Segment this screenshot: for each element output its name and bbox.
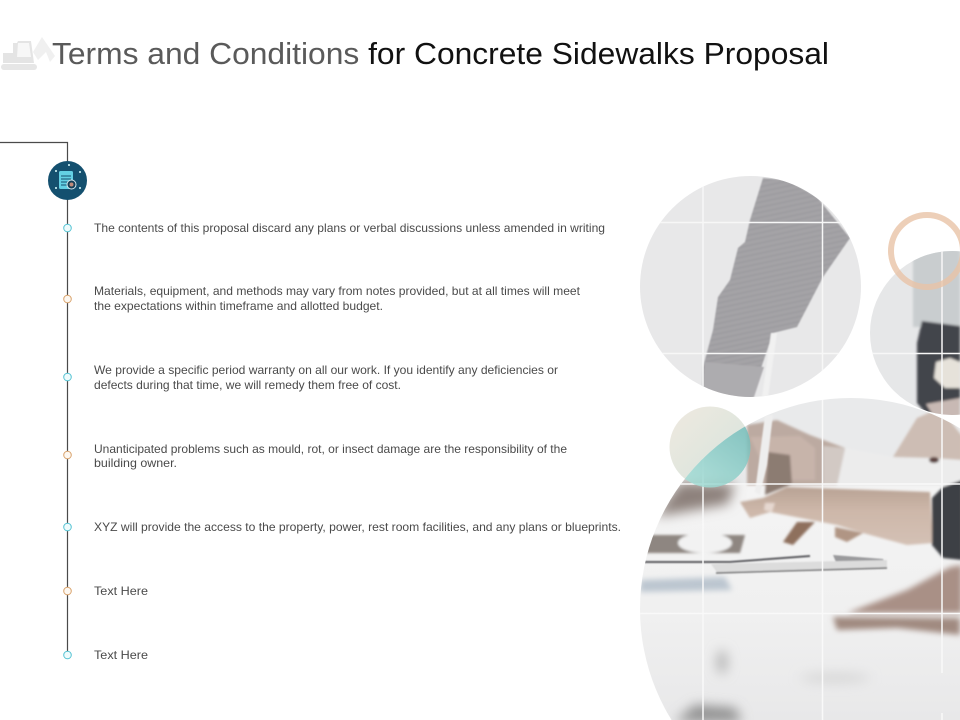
decorative peach ring <box>891 215 960 287</box>
item 7 <box>64 648 148 662</box>
icon: faint excavator <box>1 37 55 70</box>
photo circle: sleeve <box>640 176 861 397</box>
item 6: Text Here <box>94 584 148 598</box>
item 4: Unanticipated problems such as mould, rot, or insect damage are the responsibility of the <box>94 442 567 456</box>
item 2: Materials, equipment, and methods may vary from notes provided, but at all times will meet <box>94 284 581 298</box>
item 4 <box>64 442 567 470</box>
timeline connector <box>0 142 68 655</box>
decorative mint circle <box>670 406 750 488</box>
item 3: We provide a specific period warranty on all our work. If you identify any deficiencies or <box>94 363 558 377</box>
photo circle: dark suit <box>870 251 960 415</box>
item 5: XYZ will provide the access to the property, power, rest room facilities, and any plans or blueprints. <box>94 520 621 534</box>
item 2 <box>64 284 581 313</box>
mint circle overlap on photo <box>685 426 750 488</box>
item 6 <box>64 584 148 598</box>
title: Terms and Conditions for Concrete Sidewalks Proposal <box>52 36 829 71</box>
item 1: The contents of this proposal discard any plans or verbal discussions unless amended in writing <box>94 221 605 235</box>
item 3 <box>64 363 558 392</box>
icon: document badge <box>48 161 87 200</box>
item 7: Text Here <box>94 648 148 662</box>
item 4: building owner. <box>94 456 177 470</box>
item 2: the expectations within timeframe and allotted budget. <box>94 299 383 313</box>
photo circle: hands at table <box>630 390 960 720</box>
item 3: defects during that time, we will remedy them free of cost. <box>94 378 401 392</box>
